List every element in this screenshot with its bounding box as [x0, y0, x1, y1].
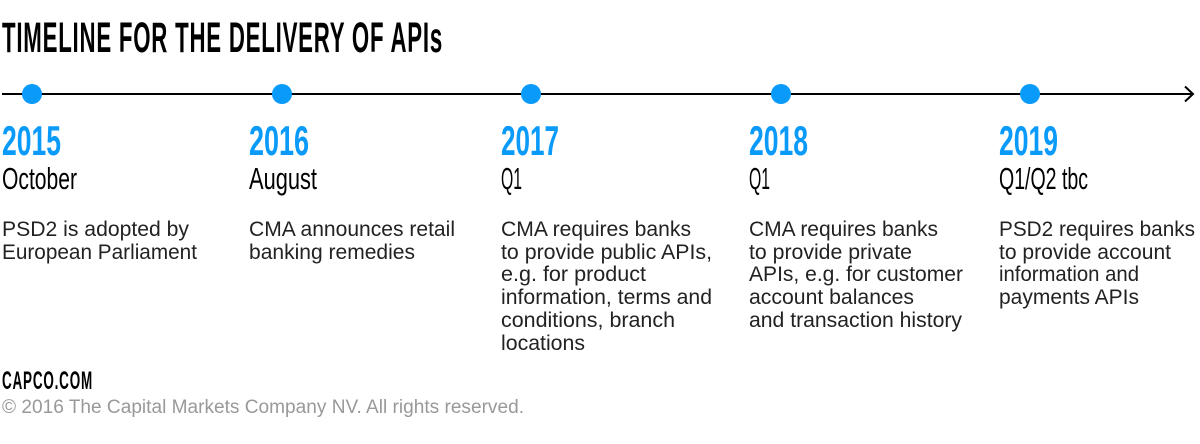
marker: 2015 — [22, 84, 42, 104]
year: 2019: 2019 — [999, 117, 1058, 164]
period: Q1: Q1 — [749, 161, 770, 196]
description: 2017: CMA requires banks — [501, 218, 691, 241]
description: 2017: locations — [501, 332, 585, 355]
period: Q1/Q2 tbc: Q1/Q2 tbc — [999, 161, 1088, 196]
description: 2015: PSD2 is adopted by — [2, 218, 189, 241]
milestone: 2016 — [249, 84, 455, 264]
description: 2017: e.g. for product — [501, 263, 646, 286]
timeline arrow — [2, 86, 1193, 102]
marker: 2016 — [272, 84, 292, 104]
period: August: August — [249, 161, 317, 196]
marker: 2018 — [771, 84, 791, 104]
milestone: 2018 — [749, 84, 963, 332]
milestone: 2015 — [2, 84, 197, 264]
description: 2015: European Parliament — [2, 241, 197, 264]
period: October: October — [2, 161, 77, 196]
description: 2018: account balances — [749, 286, 914, 309]
marker: 2019 — [1020, 84, 1040, 104]
description: 2019: to provide account — [999, 241, 1171, 264]
year: 2016: 2016 — [249, 117, 309, 164]
description: 2017: conditions, branch — [501, 309, 675, 332]
footer brand: CAPCO.COM — [2, 367, 93, 395]
description: 2018: and transaction history — [749, 309, 962, 332]
description: 2016: CMA announces retail — [249, 218, 455, 241]
title: TIMELINE FOR THE DELIVERY OF APIs — [2, 14, 443, 62]
year: 2017: 2017 — [501, 117, 559, 164]
description: 2019: payments APIs — [999, 286, 1139, 309]
marker: 2017 — [521, 84, 541, 104]
description: 2018: APIs, e.g. for customer — [749, 263, 963, 286]
description: 2017: information, terms and — [501, 286, 712, 309]
description: 2017: to provide public APIs, — [501, 241, 712, 264]
milestone: 2019 — [999, 84, 1195, 309]
milestone: 2017 — [501, 84, 712, 355]
description: 2016: banking remedies — [249, 241, 415, 264]
period: Q1: Q1 — [501, 161, 522, 196]
description: 2019: information and — [999, 263, 1139, 286]
year: 2015: 2015 — [2, 117, 61, 164]
description: 2019: PSD2 requires banks — [999, 218, 1195, 241]
copyright: © 2016 The Capital Markets Company NV. All rights reserved. — [2, 397, 524, 418]
year: 2018: 2018 — [749, 117, 808, 164]
description: 2018: CMA requires banks — [749, 218, 938, 241]
description: 2018: to provide private — [749, 241, 912, 264]
